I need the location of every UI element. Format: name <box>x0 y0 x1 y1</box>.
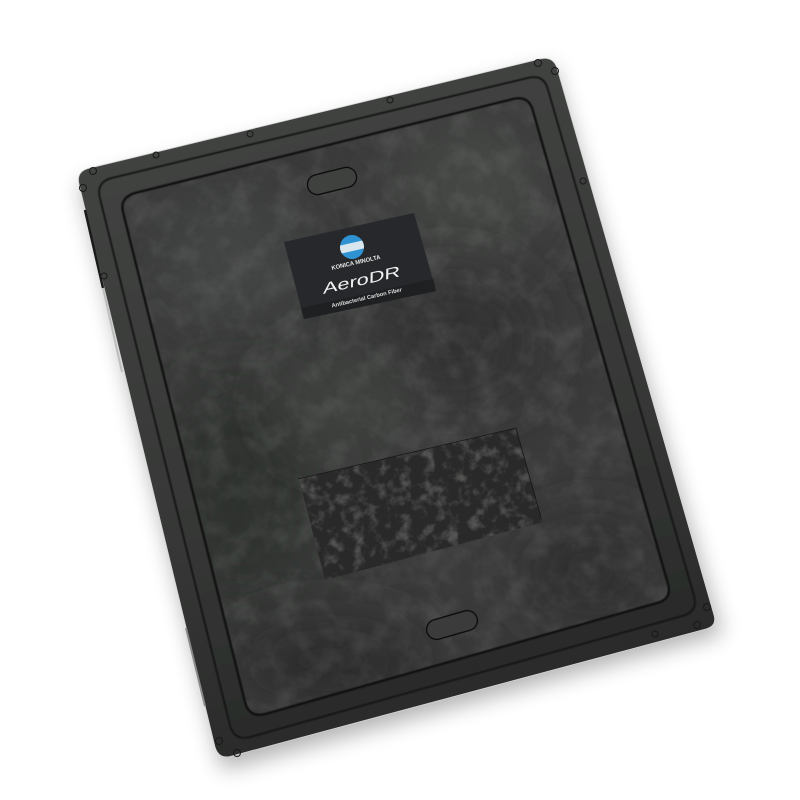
top handle slot <box>305 165 359 197</box>
panel: carbon fibre face <box>120 96 670 716</box>
icon: Konica Minolta globe <box>340 235 364 259</box>
carbon weave patch <box>298 428 543 578</box>
edge slots <box>85 210 103 288</box>
panel: outer frame <box>78 58 715 757</box>
tagline: Antibacterial Carbon Fiber <box>331 287 403 309</box>
product name: AeroDR <box>323 263 400 298</box>
frame screws <box>80 60 710 756</box>
bottom handle slot <box>424 608 480 642</box>
drop shadow <box>80 66 722 770</box>
outer raised groove <box>99 77 695 738</box>
brand name: KONICA MINOLTA <box>331 255 382 272</box>
label: AeroDR badge <box>284 213 436 319</box>
product photo: AeroDR detector panel <box>71 57 730 778</box>
